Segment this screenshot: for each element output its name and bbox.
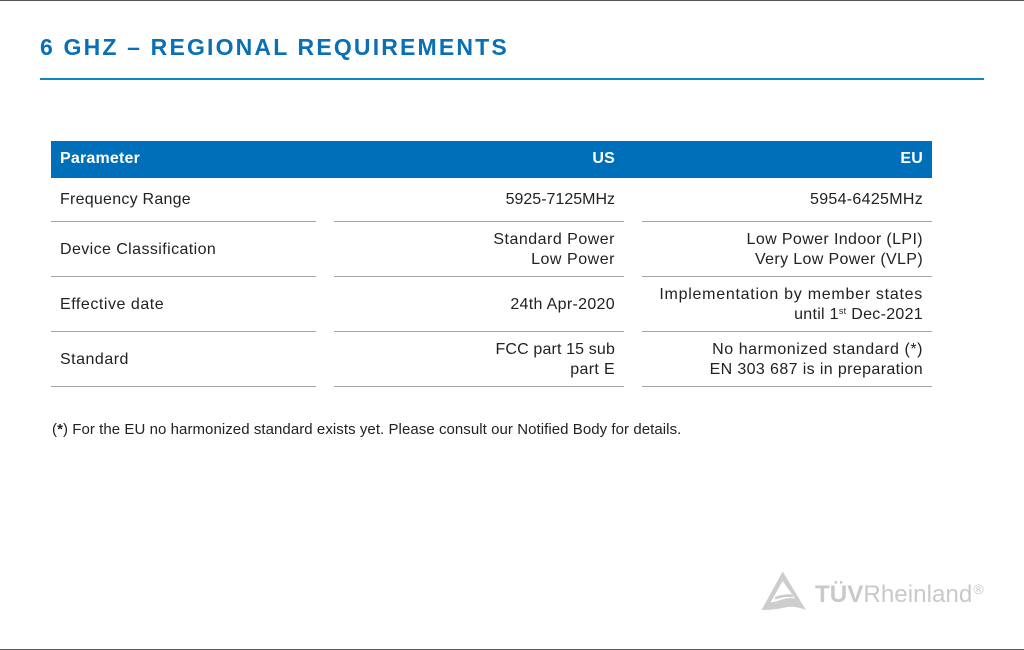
row: effective date: until 1st Dec-2021 (794, 306, 923, 323)
regional requirements table (51, 141, 932, 387)
row: device classification: Device Classification (60, 241, 216, 258)
footnote: (*) For the EU no harmonized standard exists yet. Please consult our Notified Body for details. (52, 421, 681, 438)
table header row: EU (900, 150, 923, 167)
row: device classification: Standard Power (493, 231, 615, 248)
row: device classification: Low Power Indoor (LPI) (747, 231, 923, 248)
row: frequency range: Frequency Range (60, 191, 191, 208)
row: effective date: Effective date (60, 296, 164, 313)
row: effective date (60, 286, 923, 323)
row: effective date: 24th Apr-2020 (510, 296, 615, 313)
table header row: Parameter (60, 150, 140, 167)
row: device classification (60, 231, 923, 268)
logo wordmark: TÜVRheinland® (815, 581, 984, 608)
logo: TÜV Rheinland (762, 572, 984, 610)
row: standard: Standard (60, 351, 129, 368)
row: device classification: Very Low Power (VLP) (755, 251, 923, 268)
row: standard: No harmonized standard (*) (712, 341, 923, 358)
row: frequency range (60, 191, 923, 208)
row: standard: EN 303 687 is in preparation (710, 361, 923, 378)
row: frequency range: 5925-7125MHz (506, 191, 615, 208)
row: device classification: Low Power (531, 251, 615, 268)
row: standard: FCC part 15 sub (496, 341, 615, 358)
table header row (51, 141, 932, 178)
row: standard: part E (570, 361, 615, 378)
icon: triangle (762, 572, 806, 610)
title: 6 GHZ – REGIONAL REQUIREMENTS (40, 34, 509, 60)
table header row: US (592, 150, 615, 167)
row: standard (60, 341, 923, 378)
row: frequency range: 5954-6425MHz (810, 191, 923, 208)
row: effective date: Implementation by member states (659, 286, 923, 303)
